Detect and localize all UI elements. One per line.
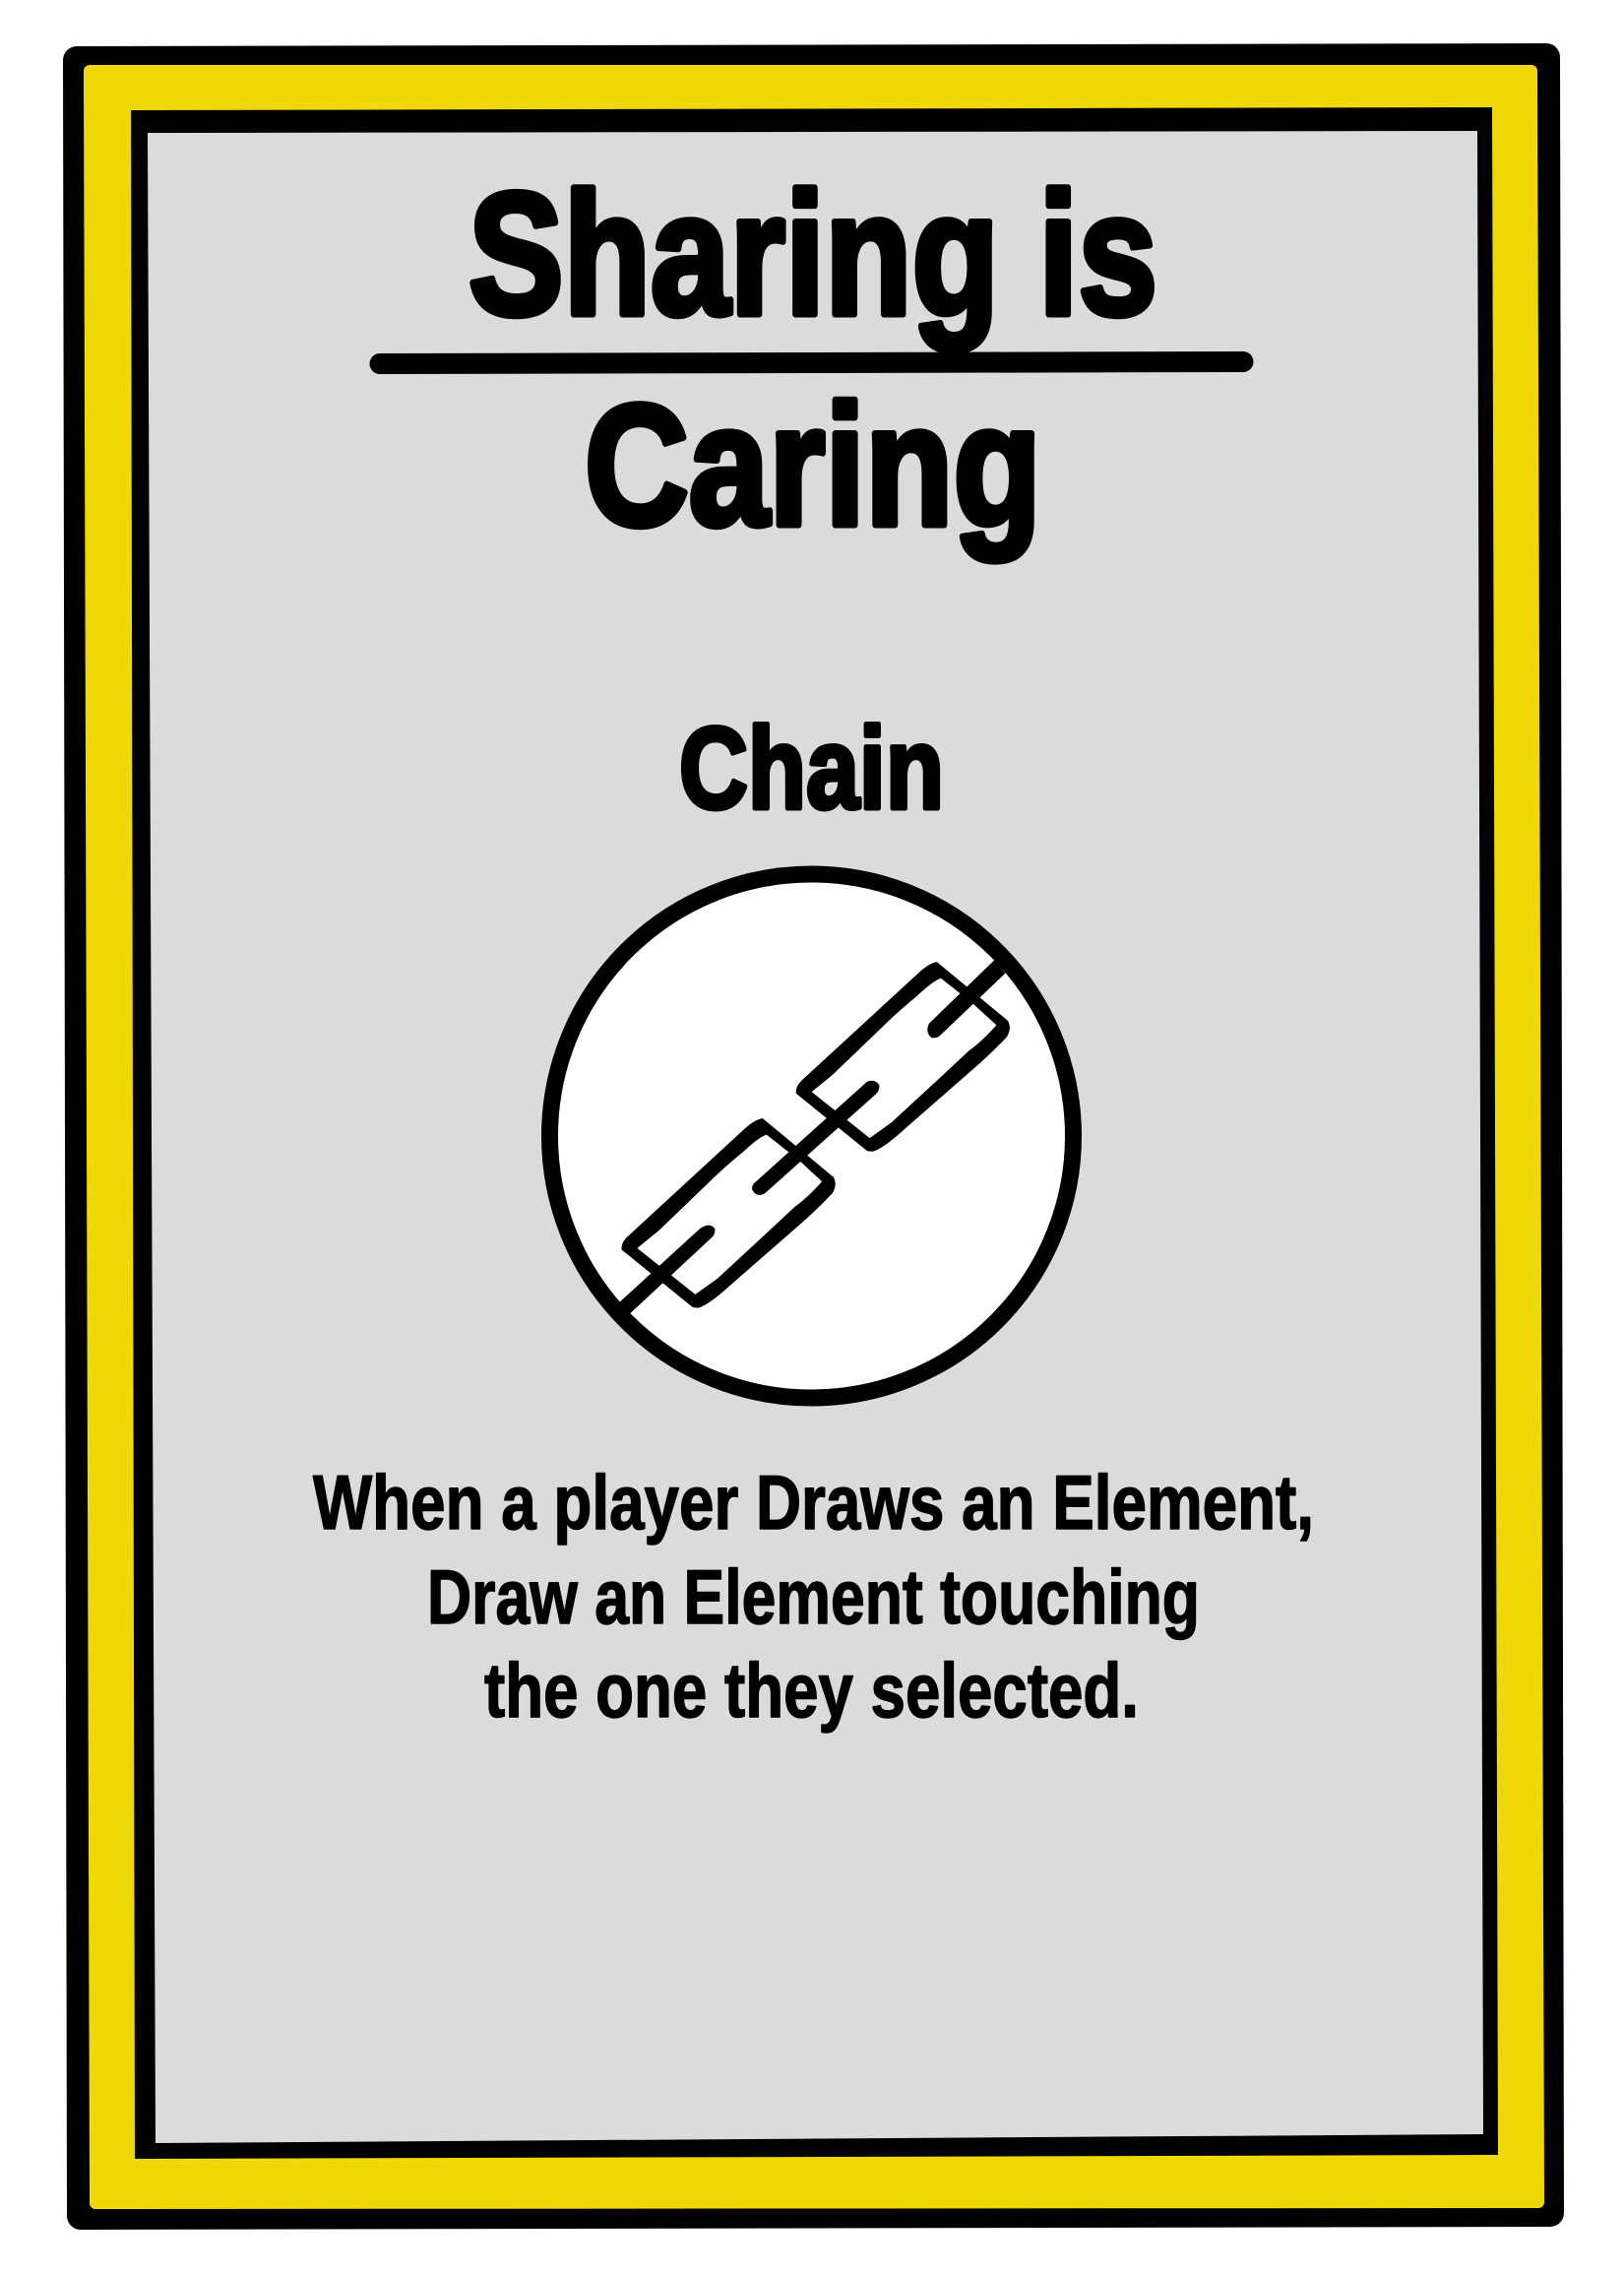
title xyxy=(380,157,1243,562)
icon circle xyxy=(549,874,1073,1398)
rule text xyxy=(313,1459,1314,1734)
upper chain link xyxy=(797,963,1009,1151)
rule line two: Draw an Element touching xyxy=(427,1553,1200,1640)
inner black border xyxy=(131,107,1498,2159)
lower chain link xyxy=(622,1119,835,1307)
lower connector stroke xyxy=(620,1227,715,1312)
icon: broken chain in circle xyxy=(549,874,1073,1398)
card name: Chain xyxy=(679,704,944,834)
rule line one: When a player Draws an Element, xyxy=(313,1459,1314,1546)
rule line three: the one they selected. xyxy=(484,1647,1139,1734)
title divider xyxy=(380,362,1243,364)
chain links xyxy=(620,961,1009,1312)
upper connector stroke xyxy=(928,961,1004,1037)
middle connector stroke xyxy=(753,1082,878,1194)
title line one: Sharing is xyxy=(468,157,1157,351)
grey card panel xyxy=(148,131,1483,2143)
title line two: Caring xyxy=(585,370,1041,562)
